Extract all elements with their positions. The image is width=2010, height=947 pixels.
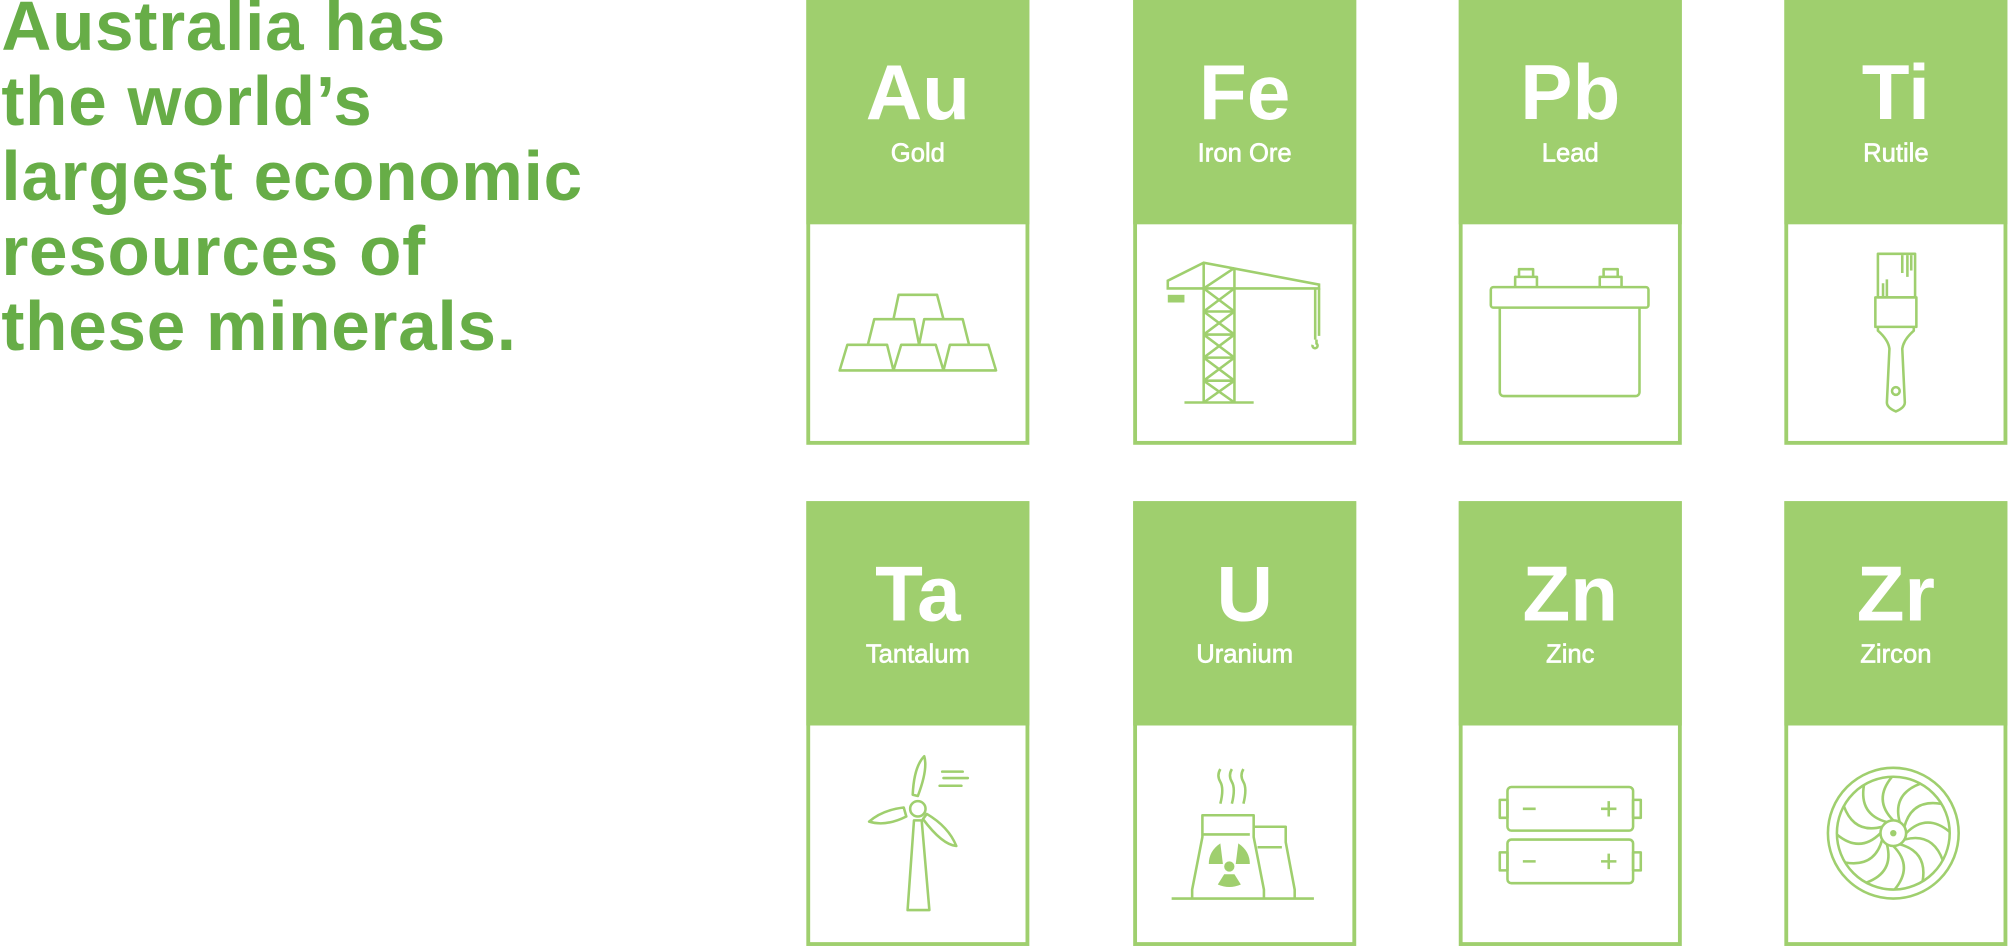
title: largest economic (1, 137, 583, 215)
title: these minerals. (1, 287, 517, 365)
card: Zn Zinc (1459, 501, 1682, 944)
card: Ti Rutile: Rutile (1863, 140, 1929, 168)
icon: radiation trefoil (1209, 843, 1250, 887)
icon: crane (1168, 263, 1319, 402)
card: Au Gold: Gold (891, 140, 945, 168)
icon: wind turbine (869, 756, 968, 910)
card: U Uranium (1133, 501, 1356, 944)
card: Fe Iron Ore (1133, 0, 1356, 443)
title: resources of (1, 212, 426, 290)
icon: turbine fan (1828, 768, 1959, 899)
card: Ta Tantalum: Tantalum (866, 641, 970, 669)
icon: car battery (1491, 269, 1648, 396)
card: Au Gold: Au (866, 48, 970, 136)
card: Zr Zircon: Zircon (1860, 641, 1931, 669)
card: Ta Tantalum: Ta (875, 549, 961, 637)
card: Pb Lead: Pb (1520, 48, 1620, 136)
card: Fe Iron Ore: Iron Ore (1198, 140, 1292, 168)
icon: paintbrush (1875, 254, 1916, 411)
card: Pb Lead: Lead (1542, 140, 1599, 168)
title: the world’s (1, 62, 373, 140)
card: Zn Zinc: Zinc (1546, 641, 1595, 669)
card: U Uranium: U (1216, 549, 1273, 637)
card: Zn Zinc: Zn (1523, 549, 1618, 637)
card: Ti Rutile: Ti (1862, 48, 1930, 136)
card: Fe Iron Ore: Fe (1199, 48, 1290, 136)
card: Zr Zircon (1784, 501, 2007, 944)
icon: nuclear plant (1172, 769, 1314, 899)
card: Pb Lead (1459, 0, 1682, 443)
icon: batteries (1500, 787, 1641, 883)
card: Au Gold (806, 0, 1029, 443)
icon: gold bars (840, 295, 996, 370)
card: Ta Tantalum (806, 501, 1029, 944)
title (1, 0, 583, 365)
card: Ti Rutile (1784, 0, 2007, 443)
card: Zr Zircon: Zr (1857, 549, 1935, 637)
card: U Uranium: Uranium (1196, 641, 1293, 669)
